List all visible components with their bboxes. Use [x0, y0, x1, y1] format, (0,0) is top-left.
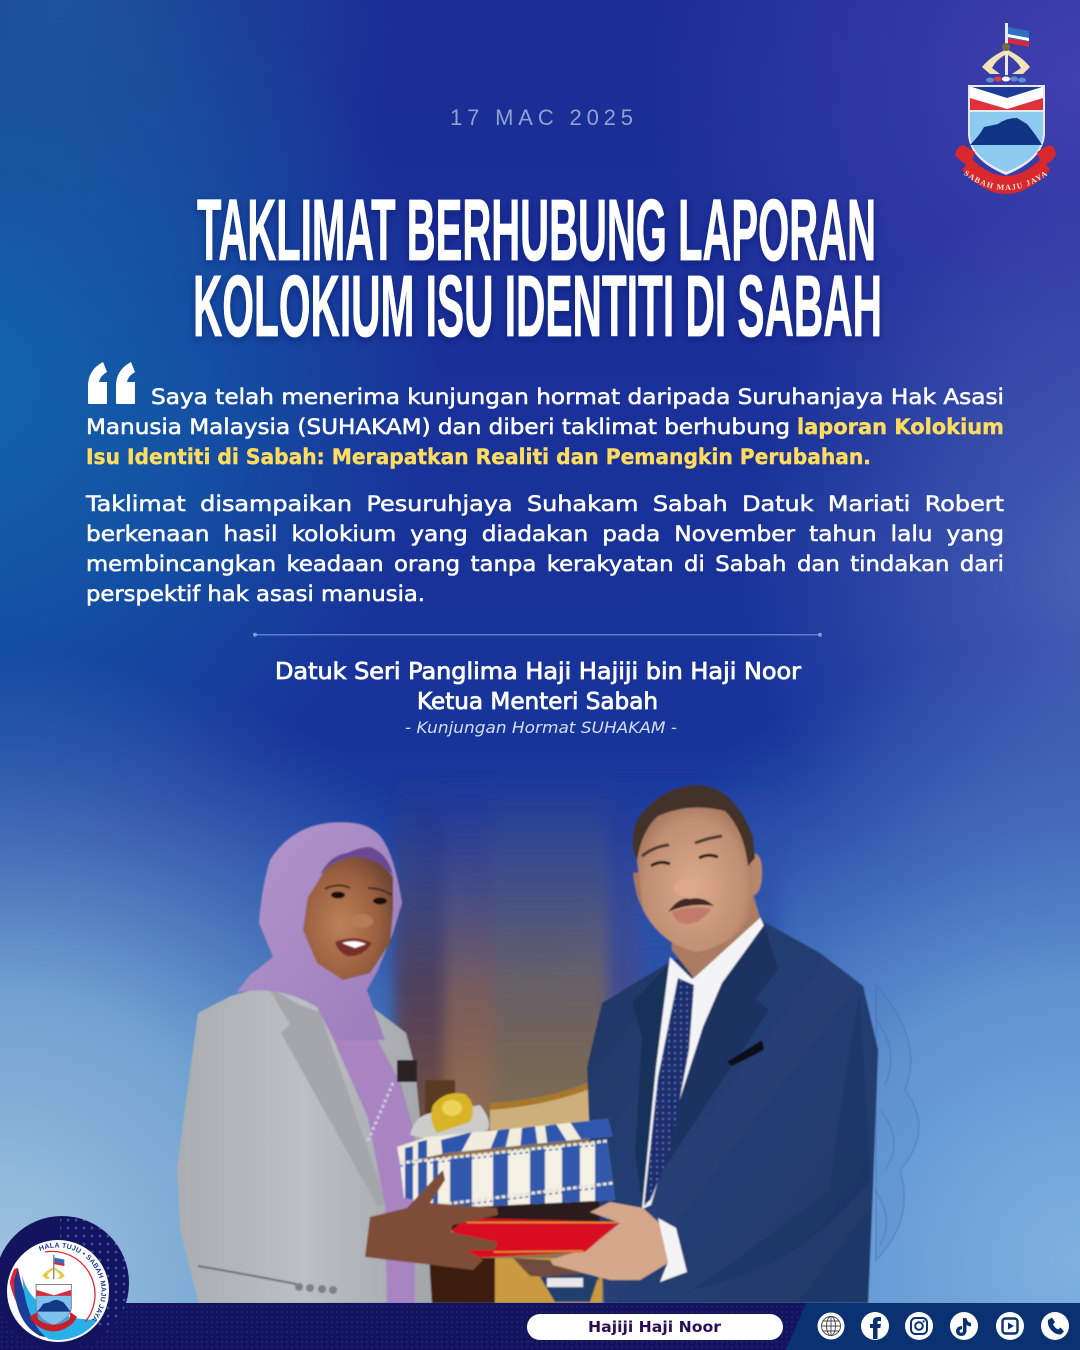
woman's hands: [365, 1170, 498, 1270]
name tag: [397, 1060, 417, 1082]
facial features: [325, 885, 392, 956]
photo: two officials exchanging a gift: [177, 770, 878, 1303]
suit: [587, 922, 878, 1303]
gold chair: [425, 1080, 610, 1303]
ribbon bow: [410, 1093, 489, 1143]
logo swooshes: [10, 1268, 98, 1340]
scarf: [317, 1005, 415, 1303]
mask and cuff under hands: [540, 1272, 600, 1302]
right lapel: [645, 925, 778, 1208]
man's hand: [550, 1202, 668, 1280]
coat of arms of Sabah: SABAH MAJU JAYA: [964, 170, 1048, 190]
man: [513, 785, 878, 1303]
red box: [452, 1218, 620, 1258]
attribution: Ketua Menteri Sabah: [417, 689, 658, 715]
jacket: [177, 986, 432, 1303]
left lapel: [632, 965, 668, 1204]
quote paragraph 1: Isu Identiti di Sabah: Merapatkan Realiti dan Pemangkin Perubahan.: [86, 445, 871, 469]
quote paragraph 2: Taklimat disampaikan Pesuruhjaya Suhakam Sabah Datuk Mariati Robert: [85, 492, 1004, 516]
room backdrop: [395, 770, 780, 1303]
lid: [396, 1118, 613, 1163]
sleeve cuff line: [198, 1266, 296, 1284]
sleeve seam shading: [690, 990, 870, 1290]
logo badge: Hala Tuju: HALA TUJU • SABAH MAJU JAYA: [38, 1242, 106, 1321]
social icons: [818, 1312, 1069, 1340]
neck: [670, 890, 760, 978]
name pill: [527, 1314, 783, 1340]
hijab: [237, 822, 402, 1040]
embroidery: [367, 1083, 393, 1143]
facial features: [642, 836, 722, 924]
icon: globe: [818, 1312, 844, 1340]
logo badge: Hala Tuju: [0, 1216, 129, 1348]
quote paragraph 2: [85, 492, 1004, 606]
woman: [177, 822, 432, 1303]
dashed trims: [400, 1141, 613, 1206]
shirt: [642, 917, 764, 1209]
man's hand over red box: [552, 1223, 640, 1270]
attribution: [275, 659, 802, 737]
icon: phone: [1041, 1312, 1069, 1340]
icon: video: [996, 1312, 1024, 1340]
coat of arms of Sabah: [955, 23, 1056, 194]
footer bar: [0, 1303, 1080, 1350]
attribution: - Kunjungan Hormat SUHAKAM -: [405, 718, 677, 737]
quote paragraph 1: Manusia Malaysia (SUHAKAM) dan diberi taklimat berhubung: [86, 415, 790, 439]
shadow under gift: [440, 1200, 610, 1230]
icon: instagram: [905, 1312, 933, 1340]
lapel: [267, 986, 387, 1207]
pocket square: [727, 1040, 764, 1066]
gift box: [390, 1093, 620, 1215]
icon: tiktok: [950, 1312, 978, 1340]
quote paragraph 1: laporan Kolokium: [797, 415, 1004, 439]
shirt cuff: [658, 1218, 687, 1282]
quote paragraph 2: berkenaan hasil kolokium yang diadakan pada November tahun lalu yang: [86, 522, 1004, 546]
hair: [633, 785, 755, 866]
face: [303, 857, 393, 980]
crest in logo: [30, 1255, 77, 1331]
face: [637, 797, 752, 952]
decorative batik motif at right: [875, 985, 919, 1260]
quote mark icon: [88, 362, 135, 404]
inner hijab: [320, 847, 393, 875]
jacket buttons: [295, 1283, 337, 1294]
body: [400, 1140, 616, 1208]
necktie: [644, 978, 694, 1206]
date: 17 MAC 2025: [450, 105, 633, 130]
icon: facebook: [861, 1312, 889, 1340]
man's lower hand: [513, 1258, 600, 1280]
quote paragraph 1: Saya telah menerima kunjungan hormat daripada Suruhanjaya Hak Asasi: [151, 385, 1004, 409]
quote paragraph 1: [86, 385, 1004, 469]
quote paragraph 2: membincangkan keadaan orang tanpa kerakyatan di Sabah dan tindakan dari: [86, 552, 1004, 576]
attribution: Datuk Seri Panglima Haji Hajiji bin Haji Noor: [275, 659, 802, 685]
name pill: Hajiji Haji Noor: [588, 1318, 722, 1336]
title: [193, 182, 882, 355]
quote paragraph 2: perspektif hak asasi manusia.: [86, 582, 425, 606]
ears: [750, 853, 762, 896]
